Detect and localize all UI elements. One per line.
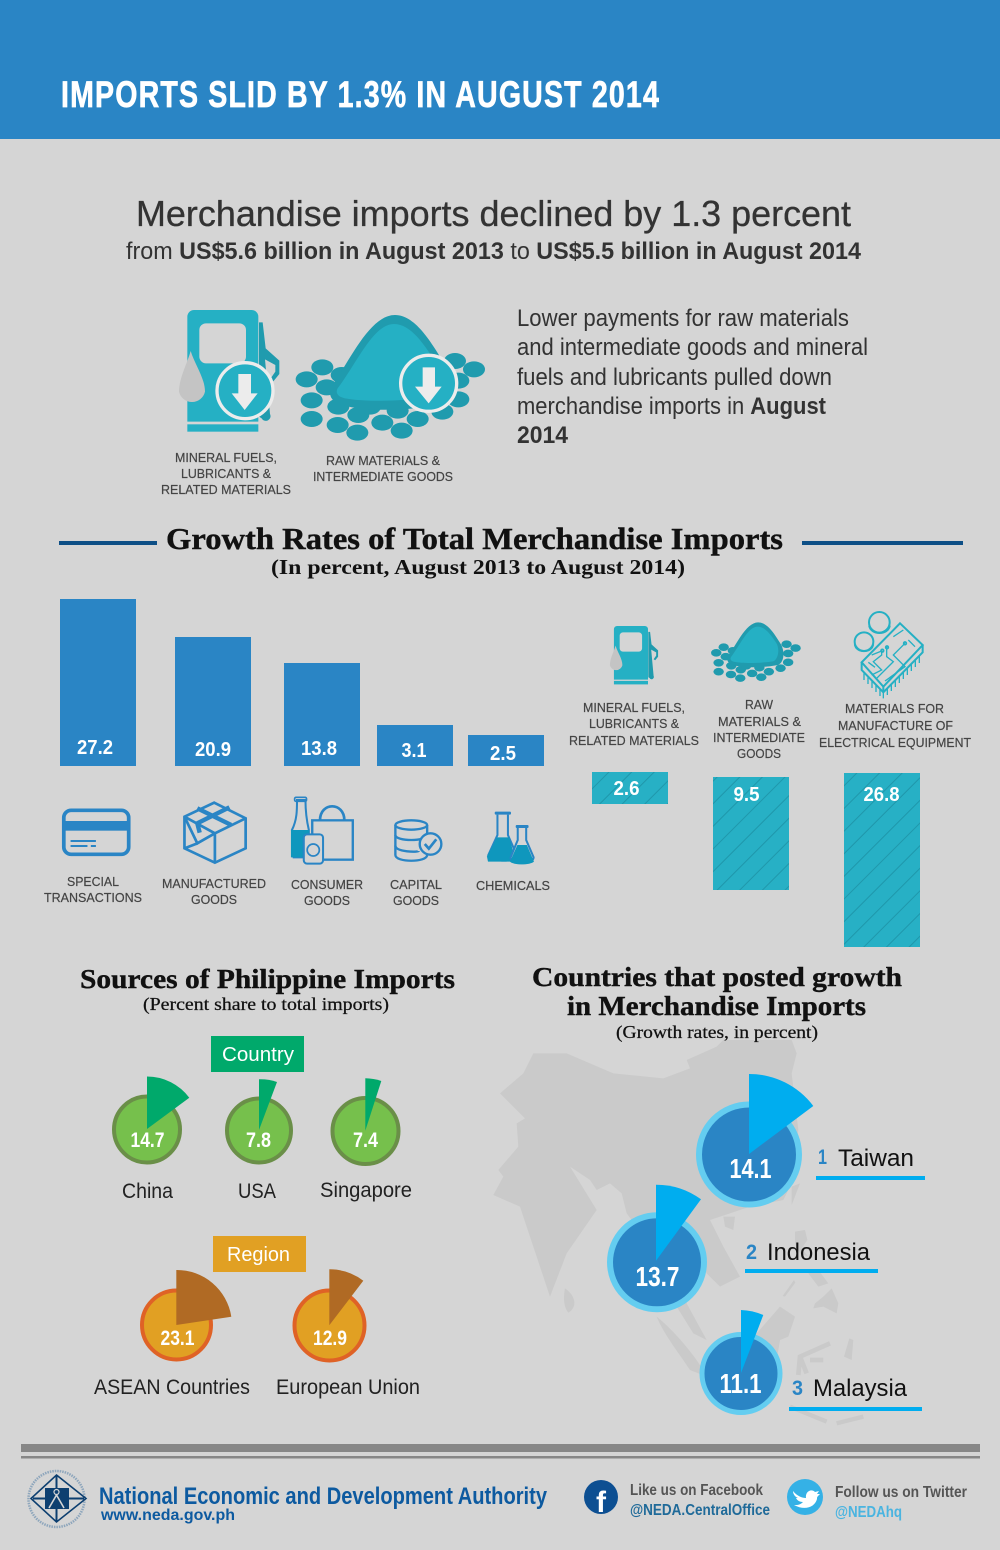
badge: country: Country <box>222 1044 294 1066</box>
label: materials for electrical equipment: ELECTRICAL EQUIPMENT <box>819 735 971 750</box>
explanatory paragraph: Lower payments for raw materials <box>517 305 849 332</box>
bar: mineral fuels <box>592 772 668 804</box>
heading: countries with growth <box>532 962 902 1043</box>
headline block <box>126 193 862 265</box>
label: manufactured goods: GOODS <box>191 892 237 907</box>
label: materials for electrical equipment <box>819 701 971 750</box>
pie: China <box>114 1076 189 1203</box>
bar: electrical equipment materials <box>844 773 920 947</box>
badge: region: Region <box>227 1244 290 1266</box>
label: mineral fuels: MINERAL FUELS, <box>583 700 685 715</box>
pie: ASEAN countries <box>94 1270 250 1399</box>
heading: sources of imports: Sources of Philippine Imports <box>80 964 455 994</box>
pie: Taiwan: Taiwan <box>838 1145 914 1172</box>
label: special transactions: SPECIAL <box>67 874 119 889</box>
pie: China: 14.7 <box>130 1129 164 1152</box>
bar: chemicals: 2.5 <box>490 743 516 765</box>
icon: small fuel pump <box>610 626 658 684</box>
label: raw materials: INTERMEDIATE <box>713 730 805 745</box>
bar: capital goods <box>377 725 453 766</box>
panel: declining categories <box>569 612 971 947</box>
icon: raw materials pile with down arrow: RAW MATERIALS & <box>326 453 440 468</box>
bar: raw materials <box>713 777 789 890</box>
bar: manufactured goods: 20.9 <box>195 739 231 761</box>
icon: fuel pump with down arrow: RELATED MATERIALS <box>161 482 291 497</box>
icon: parcel box <box>184 803 246 863</box>
pie: Indonesia: 13.7 <box>636 1261 680 1292</box>
section heading: growth rates: (In percent, August 2013 to August 2014) <box>271 555 685 579</box>
label: capital goods <box>390 877 442 908</box>
label: mineral fuels <box>569 700 699 748</box>
icon: consumer goods <box>291 797 353 864</box>
heading: countries with growth: Countries that posted growth <box>532 962 902 992</box>
icon: lab flasks <box>487 812 534 864</box>
heading: sources of imports <box>80 964 455 1015</box>
pie: ASEAN countries: ASEAN Countries <box>94 1376 250 1399</box>
pie: Singapore: Singapore <box>320 1179 412 1202</box>
bar chart: growing import categories <box>60 599 544 766</box>
label: consumer goods: CONSUMER <box>291 877 363 892</box>
label: manufactured goods <box>162 876 266 907</box>
icon: fuel pump with down arrow: LUBRICANTS & <box>181 466 271 481</box>
badge: region <box>213 1236 306 1272</box>
pie: Malaysia: Malaysia <box>813 1375 908 1402</box>
pie: Singapore <box>320 1078 412 1202</box>
heading: countries with growth: in Merchandise Imports <box>567 991 866 1021</box>
section heading: growth rates <box>59 521 963 579</box>
icon row: import categories <box>44 797 550 908</box>
section heading: growth rates: Growth Rates of Total Merchandise Imports <box>166 521 783 556</box>
pie: USA: USA <box>238 1180 276 1203</box>
pie: Taiwan: 14.1 <box>730 1153 772 1184</box>
explanatory paragraph: 2014 <box>517 422 569 449</box>
icon: raw materials pile with down arrow <box>296 315 485 484</box>
title: IMPORTS SLID BY 1.3% IN AUGUST 2014 <box>61 74 660 115</box>
bar: special transactions <box>60 599 136 766</box>
pie: ASEAN countries: 23.1 <box>160 1327 195 1350</box>
pie: European Union <box>276 1269 420 1399</box>
footer: Twitter: @NEDAhq <box>835 1504 902 1521</box>
footer: NEDA name <box>99 1483 547 1524</box>
pie: Malaysia <box>702 1310 922 1412</box>
heading: countries with growth: (Growth rates, in percent) <box>616 1022 818 1043</box>
footer rules <box>21 1444 980 1458</box>
pie: Singapore: 7.4 <box>353 1129 378 1152</box>
label: mineral fuels: LUBRICANTS & <box>589 716 679 731</box>
bar: mineral fuels: 2.6 <box>614 778 640 800</box>
pie: Malaysia: 11.1 <box>720 1368 762 1399</box>
bar: capital goods: 3.1 <box>402 740 426 762</box>
pie: Taiwan <box>699 1074 925 1204</box>
badge: country <box>211 1036 304 1072</box>
bar: consumer goods: 13.8 <box>301 738 337 760</box>
label: raw materials: MATERIALS & <box>718 714 801 729</box>
pie: Indonesia: Indonesia <box>767 1239 871 1266</box>
footer: Facebook <box>584 1480 770 1519</box>
footer: NEDA name: National Economic and Development Authority <box>99 1483 547 1510</box>
label: raw materials: RAW <box>745 697 774 712</box>
label: materials for electrical equipment: MATERIALS FOR <box>845 701 944 716</box>
icon: circuit board <box>855 612 923 698</box>
bar: manufactured goods <box>175 637 251 766</box>
label: raw materials: GOODS <box>737 746 781 761</box>
label: special transactions: TRANSACTIONS <box>44 890 142 905</box>
footer: Twitter <box>787 1479 967 1521</box>
bar: raw materials: 9.5 <box>734 784 760 806</box>
icon: raw materials pile with down arrow: INTERMEDIATE GOODS <box>313 469 453 484</box>
pie: Indonesia <box>610 1185 878 1309</box>
pie: USA: 7.8 <box>246 1129 271 1152</box>
explanatory paragraph: and intermediate goods and mineral <box>517 334 868 361</box>
label: mineral fuels: RELATED MATERIALS <box>569 733 699 748</box>
pie: China: China <box>122 1180 173 1203</box>
footer: NEDA name: www.neda.gov.ph <box>100 1507 235 1524</box>
label: consumer goods <box>291 877 363 908</box>
icon: small raw materials pile <box>711 622 801 682</box>
footer: Facebook: @NEDA.CentralOffice <box>630 1502 770 1519</box>
label: raw materials <box>713 697 805 761</box>
label: capital goods: GOODS <box>393 893 439 908</box>
bar: special transactions: 27.2 <box>77 737 113 759</box>
label: manufactured goods: MANUFACTURED <box>162 876 266 891</box>
icon: fuel pump with down arrow: MINERAL FUELS, <box>175 450 277 465</box>
sub headline: from US$5.6 billion in August 2013 to US$5.5 billion in August 2014 <box>126 238 862 265</box>
bar: consumer goods <box>284 663 360 766</box>
pie: European Union: 12.9 <box>313 1327 347 1350</box>
pie: Taiwan: 1 <box>818 1146 827 1169</box>
footer: Twitter: Follow us on Twitter <box>835 1484 967 1501</box>
explanatory paragraph: merchandise imports in August <box>517 393 826 420</box>
pie: Indonesia: 2 <box>746 1241 757 1264</box>
footer: NEDA logo <box>28 1471 86 1527</box>
explanatory paragraph <box>517 305 868 449</box>
label: consumer goods: GOODS <box>304 893 350 908</box>
label: materials for electrical equipment: MANUFACTURE OF <box>838 718 953 733</box>
label: chemicals: CHEMICALS <box>476 878 550 893</box>
header banner <box>0 0 1000 139</box>
bar: electrical equipment materials: 26.8 <box>864 784 900 806</box>
label: capital goods: CAPITAL <box>390 877 442 892</box>
footer: Facebook: f <box>596 1486 607 1519</box>
pie: Malaysia: 3 <box>792 1377 803 1400</box>
icon: database with check <box>395 820 441 861</box>
explanatory paragraph: fuels and lubricants pulled down <box>517 364 832 391</box>
icon: credit card <box>63 810 130 854</box>
headline: Merchandise imports declined by 1.3 percent <box>136 193 851 234</box>
heading: sources of imports: (Percent share to total imports) <box>143 994 389 1015</box>
icon: fuel pump with down arrow <box>161 310 291 497</box>
footer: Facebook: Like us on Facebook <box>630 1482 763 1499</box>
bar: chemicals <box>468 735 544 766</box>
pie: USA <box>227 1079 291 1203</box>
map: Asia silhouette <box>493 1040 863 1423</box>
label: special transactions <box>44 874 142 905</box>
pie: European Union: European Union <box>276 1376 420 1399</box>
